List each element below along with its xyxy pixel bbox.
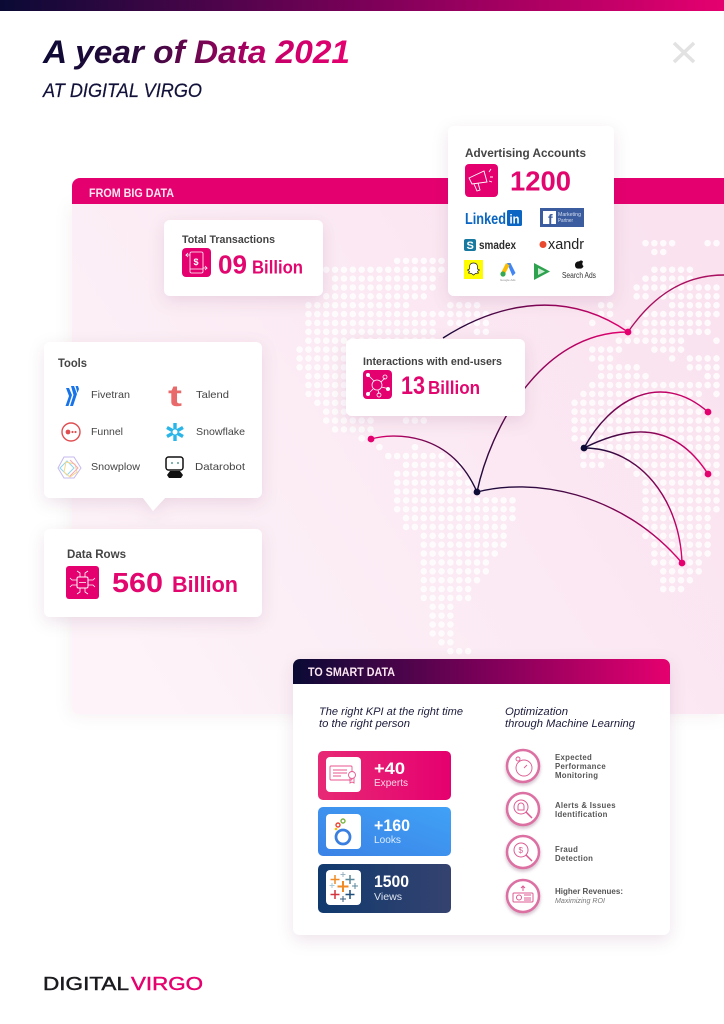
item: alerts and issues <box>507 793 616 825</box>
logo: facebook marketing partner: Partner <box>558 218 573 224</box>
logo: smadex: smadex <box>479 240 517 252</box>
tool: fivetran <box>66 386 130 406</box>
main title: A year of Data 2021 <box>42 34 350 70</box>
stat: looks: +160 <box>374 816 410 835</box>
panel: to smart data <box>293 659 670 935</box>
logo: snapchat <box>464 260 483 279</box>
icon: network <box>363 370 392 399</box>
panel header <box>72 178 724 204</box>
stat: views: Views <box>374 891 402 903</box>
tool: talend: Talend <box>196 389 229 401</box>
icon: close cross <box>674 43 694 62</box>
stat: experts: Experts <box>374 777 408 789</box>
logo: apple search ads <box>562 261 596 280</box>
stat: views <box>318 864 451 913</box>
tool: funnel <box>62 423 123 441</box>
card: tools <box>44 342 262 511</box>
stat: experts: +40 <box>374 759 405 778</box>
value: 13 <box>401 372 425 400</box>
panel: from big data <box>72 178 724 714</box>
logo: digital virgo: DIGITAL <box>43 974 129 994</box>
card label: Total Transactions <box>182 234 275 246</box>
card label: Advertising Accounts <box>465 146 586 160</box>
left column heading: to the right person <box>319 718 410 730</box>
logo: facebook marketing partner: f <box>548 211 553 227</box>
logo: xandr: xandr <box>548 236 584 253</box>
item: expected performance monitoring: Monitoring <box>555 771 598 780</box>
top gradient bar <box>0 0 724 11</box>
card: interactions with end-users <box>346 339 525 416</box>
value: 09 <box>218 250 247 280</box>
tool: snowplow: Snowplow <box>91 461 140 473</box>
card: advertising accounts <box>448 126 614 296</box>
icon: looker <box>335 819 350 844</box>
item: higher revenues: Higher Revenues: <box>555 887 623 896</box>
logo: smadex <box>464 239 517 252</box>
unit: Billion <box>172 572 238 597</box>
left column heading: The right KPI at the right time <box>319 706 463 718</box>
icon: payment <box>182 248 211 277</box>
logo: linkedin: in <box>510 212 520 226</box>
item: alerts and issues: Alerts & Issues <box>555 801 616 810</box>
tool: snowflake: Snowflake <box>196 426 245 438</box>
logo: digital virgo: VIRGO <box>131 974 203 994</box>
subtitle: AT DIGITAL VIRGO <box>42 80 202 102</box>
logo: smadex: S <box>466 240 474 252</box>
icon: stopwatch <box>516 757 532 776</box>
logo: facebook marketing partner: Marketing <box>558 212 581 218</box>
item: expected performance monitoring: Performance <box>555 762 606 771</box>
card: total transactions <box>164 220 323 296</box>
title block <box>42 34 350 102</box>
item: alerts and issues: Identification <box>555 810 608 819</box>
logo: google ads: Google Ads <box>500 278 516 282</box>
logo: digital virgo <box>43 974 203 994</box>
card label: Data Rows <box>67 549 126 561</box>
tool: fivetran: Fivetran <box>91 389 130 401</box>
tool: snowplow <box>58 457 140 478</box>
logo: google ads <box>500 263 516 282</box>
unit: Billion <box>252 258 303 278</box>
logo: linkedin: Linked <box>465 211 506 228</box>
map nodes <box>368 329 711 566</box>
tool: funnel: Funnel <box>91 426 123 438</box>
stat: looks <box>318 807 451 856</box>
tool: talend <box>168 380 229 413</box>
item: fraud detection: $ <box>518 846 524 855</box>
icon: revenue <box>513 886 533 902</box>
tool: datarobot: Datarobot <box>195 461 245 473</box>
right column heading <box>505 706 636 730</box>
panel header <box>293 659 670 684</box>
card: data rows <box>44 529 262 617</box>
stat: looks: Looks <box>374 834 401 846</box>
card label: Tools <box>58 358 87 370</box>
item: fraud detection <box>507 836 593 868</box>
tool: talend: t <box>168 380 182 413</box>
logo: play <box>534 263 550 280</box>
panel heading: TO SMART DATA <box>308 667 395 679</box>
right column heading: Optimization <box>505 706 568 718</box>
value: 560 <box>112 567 163 598</box>
icon: chip <box>66 566 99 599</box>
icon: megaphone <box>465 164 498 197</box>
icon: payment: $ <box>194 257 199 267</box>
icon: certificate <box>330 766 356 783</box>
stat: experts <box>318 751 451 800</box>
right column heading: through Machine Learning <box>505 718 636 730</box>
panel background <box>72 204 724 714</box>
item: higher revenues <box>507 880 623 912</box>
panel heading: FROM BIG DATA <box>89 188 174 200</box>
item: higher revenues: Maximizing ROI <box>555 896 605 905</box>
item: expected performance monitoring <box>507 750 606 782</box>
dotted world map <box>300 243 717 651</box>
item: fraud detection: Detection <box>555 854 593 863</box>
icon: magnifier dollar <box>514 843 532 861</box>
icon: magnifier alert <box>514 800 532 818</box>
stat: views: 1500 <box>374 872 409 891</box>
unit: Billion <box>428 378 480 398</box>
item: fraud detection: Fraud <box>555 845 578 854</box>
card label: Interactions with end-users <box>363 356 502 368</box>
connection arcs <box>371 275 724 563</box>
icon: tableau <box>330 872 358 902</box>
logo: apple search ads: Search Ads <box>562 271 596 280</box>
tool: datarobot <box>166 457 245 478</box>
left column heading <box>319 706 463 730</box>
logo: facebook marketing partner <box>540 208 584 227</box>
value: 1200 <box>510 166 571 196</box>
item: expected performance monitoring: Expected <box>555 753 592 762</box>
tool: snowflake <box>167 423 245 441</box>
